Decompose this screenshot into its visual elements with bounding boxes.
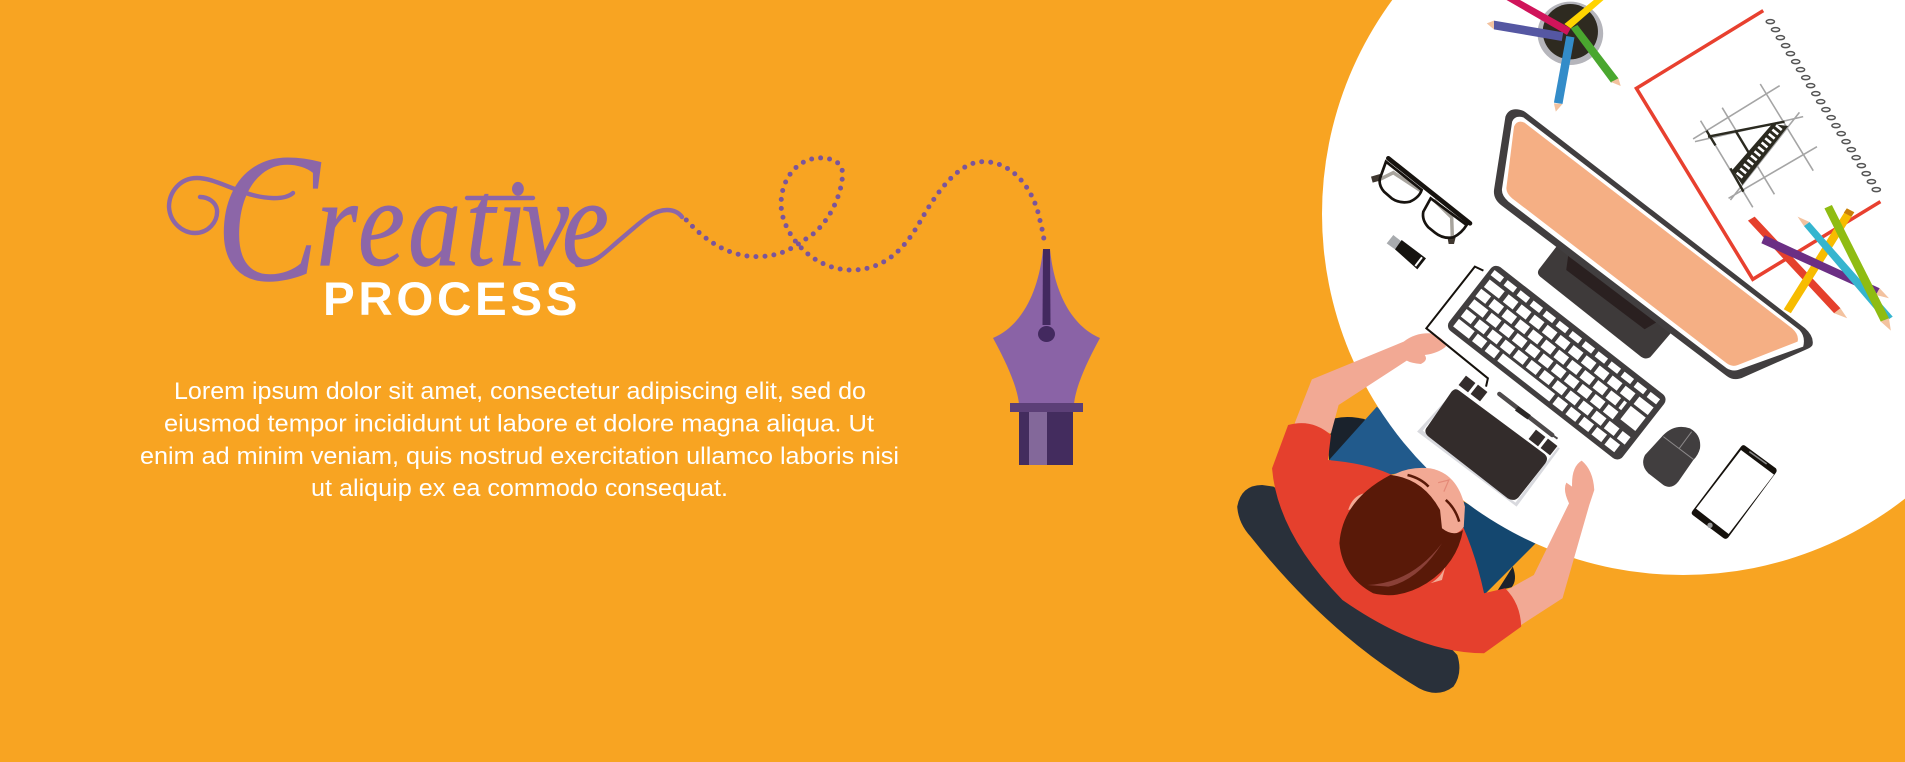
left arm and hand [1295,333,1446,433]
dotted line from nib [686,158,1044,270]
body text: ut aliquip ex ea commodo consequat. [311,475,728,502]
notebook [1636,11,1880,279]
person [1272,333,1594,653]
drawing tablet [1417,384,1560,507]
tablet cable [1426,267,1488,387]
desk items lower [1417,384,1560,507]
spiral binding [1766,20,1880,192]
red shirt [1272,423,1521,653]
mouse [1643,427,1700,487]
script word Creative: reative [316,155,609,293]
monitor [1494,109,1813,379]
letter A sketch [1693,84,1817,207]
legs under the desk [1329,407,1536,595]
head [1339,468,1465,595]
loose pencils [1748,205,1893,331]
script flourishes [169,178,682,265]
body text: Lorem ipsum dolor sit amet, consectetur adipiscing elit, sed do [174,378,866,405]
monitor stand [1538,246,1671,358]
smartphone [1692,445,1777,539]
body text: enim ad minim veniam, quis nostrud exercitation ullamco laboris nisi [140,443,899,470]
subtitle PROCESS: PROCESS [323,273,581,326]
mouse and phone group [1643,427,1777,539]
stylus pen [1499,394,1558,439]
usb stick [1387,235,1426,269]
pencils in cup [1487,0,1621,112]
keyboard [1445,263,1668,462]
title [169,116,682,326]
glasses and usb group [1371,158,1470,269]
desk circle [1322,0,1905,575]
right arm and hand [1507,461,1594,625]
glasses [1371,158,1470,244]
icon: fountain pen nib [993,249,1100,465]
body text: eiusmod tempor incididunt ut labore et dolore magna aliqua. Ut [164,410,874,438]
chair [1237,485,1459,693]
script word Creative: C [215,116,322,321]
tablet buttons [1459,376,1557,455]
desk items upper [1487,0,1893,379]
pencil cup [1538,2,1603,65]
body text [140,378,899,502]
